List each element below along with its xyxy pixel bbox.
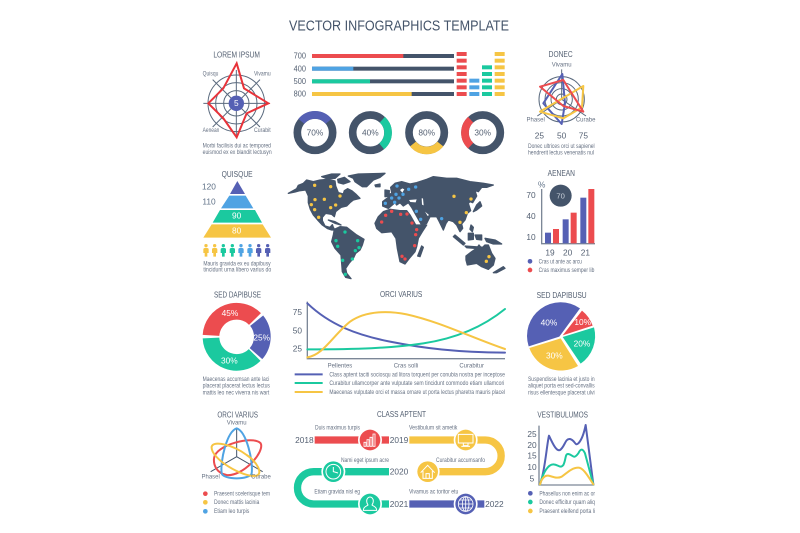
chart axes [539,426,594,485]
purple curve [307,303,505,353]
legend: Donec mattis lacinia [214,500,260,506]
pie description: risus ellentesque placerat ulvi [528,390,595,396]
x axis values: 20 [563,247,573,257]
donut 70%: 70% [307,127,324,137]
radar labels: Vivamu [552,63,572,69]
milestone captions: Etiam gravida nisl eg [314,490,360,496]
donut 70% [297,115,333,150]
donut chart [211,311,262,362]
radar labels: Aenean [203,128,219,134]
radar labels [203,72,271,134]
heading: sed dapibusu: SED DAPIBUSU [537,291,587,300]
radar axes [211,428,263,472]
donut 30% [465,115,500,150]
bars [545,189,594,243]
radar labels: Phasel [527,118,545,124]
milestone: monitor icon [454,428,478,452]
continents [288,173,505,279]
milestone captions: Vestibulum sit ametik [409,426,457,432]
donut percentages: 30% [221,355,238,365]
legend: Curabitur ullamcorper ante vulputate sem tincidunt commodo etiam ullamcori [329,381,504,387]
axis values: 15 [527,451,537,461]
timeline path segments [297,440,501,504]
horizontal bars [312,54,454,96]
scale values [535,131,588,141]
pyramid levels [203,181,271,238]
bottom row of panels [202,410,595,516]
panel: sed dapibuse donut [203,291,271,396]
heading: orci varius: ORCI VARIUS [380,290,422,299]
pie description [528,377,595,396]
legend [528,259,595,274]
axis values: 40 [526,211,536,221]
panel: orci varius line chart [293,290,506,396]
pyramid description: tincidunt urna libero varius do [203,267,272,273]
axis values: 75 [293,307,302,317]
radar grid [537,69,586,122]
green level blocks [482,65,492,96]
heading: quisque: QUISQUE [222,170,253,179]
radar labels: Curabit [254,128,271,134]
scale values: 50 [557,131,567,141]
blue map markers [384,184,443,221]
title: VECTOR INFOGRAPHICS TEMPLATE [289,19,509,35]
yellow map markers [310,184,491,263]
pie percentages: 20% [574,338,591,348]
radar labels [202,420,271,480]
bar labels: 700 [294,51,306,61]
x axis labels [328,364,484,370]
heading: lorem ipsum: LOREM IPSUM [213,51,260,60]
panel: horizontal bars and level blocks [294,51,505,99]
legend: Cras maximus semper lib [539,268,595,274]
milestone: globe icon [454,492,478,516]
x axis labels: Pellentes [328,364,352,370]
pyramid values: 80 [232,226,242,236]
year labels: 2020 [390,467,409,477]
milestone captions [314,426,486,496]
heading: sed dapibuse: SED DAPIBUSE [214,291,261,300]
milestone captions: Curabitur accumsanfo [436,458,486,464]
legend: Praesent eleifend porta li [539,509,595,515]
heading: vestibulumos: VESTIBULUMOS [537,411,588,420]
panel: lorem ipsum radar [203,51,272,156]
third row of panels [203,290,595,396]
donut 80%: 80% [418,127,436,137]
legend: Praesent scelerisque tem [214,491,270,497]
axis values [527,429,537,483]
heading: donec: DONEC [549,50,573,59]
donut description [203,377,270,396]
yellow level blocks [495,52,505,96]
radar labels [527,63,596,124]
radar labels: Vivamu [227,420,247,426]
percent sign: % [538,180,546,190]
red loop [214,440,261,475]
x axis labels: Cras solli [394,364,418,370]
green map markers [334,230,361,276]
year labels: 2019 [390,435,409,445]
red level blocks [457,52,467,96]
legend: Phasellus non enim ac or [539,491,595,497]
heading: aenean: AENEAN [548,169,575,178]
pie description: Suspendisse lacinia et justo in [528,377,595,383]
pie percentages [541,317,592,361]
axis values: 25 [527,429,537,439]
milestone: person icon [358,492,382,516]
red map markers [380,210,418,261]
legend: Etiam leo turpis [214,509,249,515]
radar labels: Quisqu [203,72,218,78]
inland seas [400,188,429,216]
milestone: house icon [416,460,440,484]
donut description: placerat placerat lectus lectus [203,384,270,390]
radar description [528,144,595,156]
chart axes [307,302,505,359]
heading: class aptent: CLASS APTENT [377,410,426,419]
yellow series [540,468,593,484]
pyramid values: 110 [202,196,216,206]
axis values [526,190,536,242]
radar yellow series [540,86,583,118]
legend: Maecenas vulputate orci et massa ornare ut porta lectus pharetra mauris placel [329,390,505,396]
radar labels: Curabe [251,474,271,480]
x axis labels: Curabitur [459,364,484,370]
year labels: 2018 [295,435,314,445]
pie percentages: 30% [546,351,563,361]
scale values: 75 [579,131,588,141]
axis values: 20 [527,440,537,450]
axis values: 50 [293,325,302,335]
donut description: Maecenas accumsan ante laci [203,377,269,383]
scale values: 25 [535,131,544,141]
radar description: euismod ex ex blandit lectusyn [203,150,272,156]
milestone captions: Duis maximus turpis [315,426,360,432]
panel: quisque pyramid [202,170,272,273]
legend [295,372,506,396]
x axis values: 21 [581,247,590,257]
pyramid description: Mauris gravida ex eu dapibusy [203,261,271,267]
x axis values: 19 [545,247,555,257]
legend: Cras ut ante ac arcu [539,259,582,265]
blue loop [221,428,252,478]
chart axes [542,189,595,244]
year labels: 2021 [390,499,409,509]
donut percentages [221,308,271,365]
axis values: 10 [527,462,537,472]
people pictograms [203,244,270,257]
bar labels: 400 [294,63,306,73]
legend: Class aptent taciti sociosqu ad litora torquent per conubia nostra per inceptose [329,372,506,378]
bar labels: 800 [294,89,306,99]
donut description: mattis leo nec viverra nis wart [203,390,270,396]
yellow loop [212,444,259,476]
pyramid values: 120 [202,182,216,192]
milestone: clock icon [321,460,345,484]
milestone captions: Nami eget ipsum acre [341,458,390,464]
bar labels [294,51,306,99]
axis values: 10 [526,232,536,242]
panel: vestibulumos area chart [527,411,595,515]
radar red series [540,80,583,112]
second row of side panels [202,169,595,274]
radar chart grid [203,70,270,137]
axis values: 5 [530,473,535,483]
radar centre value: 5 [234,98,239,108]
radar labels: Vivamu [254,72,271,78]
x axis values [545,247,590,257]
donut 40% [353,115,388,150]
pyramid description [203,261,272,273]
radar description: hendrerit lectus venenatis nul [528,150,594,156]
pyramid values [202,182,242,236]
year labels [295,435,504,509]
purple series [540,425,593,484]
radar description: Morbi facilisis dui ac tempored [203,144,271,150]
donut percentages: 45% [222,308,239,318]
pyramid values: 90 [232,211,242,221]
world map [288,173,505,279]
donut 40%: 40% [362,127,379,137]
heading: orci varius: ORCI VARIUS [217,411,258,420]
pie percentages: 40% [541,317,558,327]
radar labels: Curabe [576,118,596,124]
panel: sed dapibusu pie [527,291,595,396]
panel: orci varius venn radar [202,411,271,515]
year labels: 2022 [485,499,504,509]
radar red series [208,63,268,137]
donut 80% [409,115,444,150]
pie chart [527,302,595,371]
donut percentages: 25% [253,332,271,342]
radar blue series [543,74,565,124]
axis values [293,307,302,354]
legend [528,491,595,515]
green series [540,450,593,484]
legend: Donec efficitur quam aliq [539,500,595,506]
donut 30%: 30% [474,127,492,137]
axis values: 25 [293,344,302,354]
radar description: Donec ultrices orci ut sapienel [528,144,595,150]
top row of panels [203,19,596,156]
blue level blocks [469,79,479,96]
pie percentages: 10% [574,317,592,327]
bar labels: 500 [294,76,306,86]
milestone captions: Vivamus ac toritor etu [409,490,458,496]
yellow curve [307,312,505,357]
value bubble: 70 [556,191,565,200]
panel: aenean bar chart [526,169,595,274]
axis values: 70 [526,190,536,200]
radar description [203,144,272,156]
pie description: aliquet porta est sed-convallis [528,384,595,390]
green curve [307,309,505,349]
radar labels: Phasel [202,474,220,480]
panel: donec radar [527,50,596,156]
legend [203,491,270,515]
milestone: bar chart icon [358,428,382,452]
panel: class aptent timeline [295,410,504,516]
